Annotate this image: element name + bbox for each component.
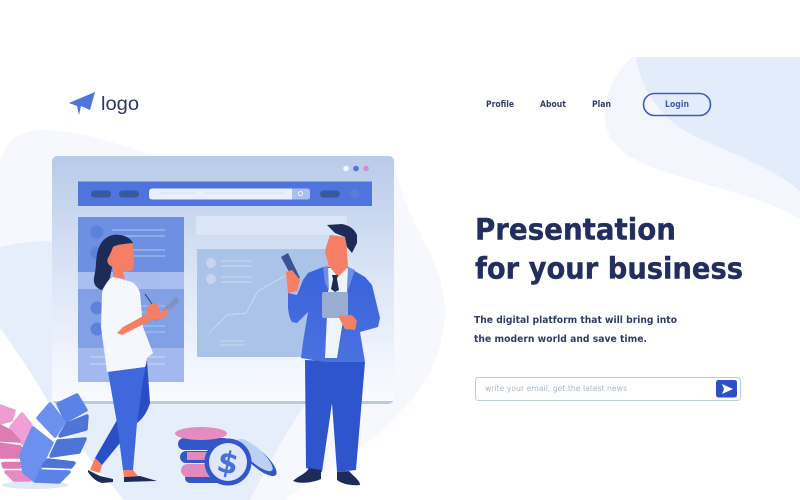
woman tablet [153, 296, 179, 321]
man trousers [305, 360, 365, 472]
navigation [486, 100, 611, 110]
background blob: top right dark [636, 57, 800, 191]
heading [475, 212, 743, 286]
heading: for your business [475, 252, 743, 286]
woman shoes [88, 470, 157, 483]
man hair [327, 224, 357, 253]
dollar coin: $ [214, 444, 242, 483]
coins stack [175, 427, 281, 486]
top content bar [196, 216, 347, 235]
description text [474, 315, 677, 345]
background blob: top right light [605, 57, 800, 219]
woman shirt [101, 277, 153, 372]
background blob: left dark [0, 241, 305, 500]
toolbar [78, 182, 372, 206]
plant shadow [2, 481, 68, 489]
description text: The digital platform that will bring into [474, 315, 677, 326]
send button [716, 380, 737, 398]
window dots [343, 166, 369, 171]
background blob: left light [0, 130, 445, 500]
placeholder text: write your email, get the latest news [485, 384, 627, 393]
woman trouser shade [137, 360, 150, 423]
woman front trouser leg [108, 366, 150, 470]
man hand with phone [286, 270, 300, 293]
top pink coin [175, 427, 227, 440]
logo text: logo [101, 94, 139, 115]
nav: profile: Profile [486, 100, 514, 110]
icon: paper plane [69, 92, 95, 115]
woman hair [94, 235, 133, 290]
woman back trouser leg [95, 420, 120, 465]
plant [0, 395, 87, 489]
description text: the modern world and save time. [474, 334, 647, 345]
tilted coin [235, 437, 281, 481]
man face and neck [325, 235, 348, 277]
line chart panel [197, 249, 332, 357]
heading: Presentation [475, 212, 676, 246]
pen [145, 294, 152, 304]
pink leaf [0, 406, 31, 480]
login button: Login [665, 100, 689, 110]
blue leaf [21, 395, 87, 482]
email input [476, 378, 740, 400]
woman face and neck [107, 243, 134, 279]
man jacket [288, 267, 380, 362]
man tablet [322, 292, 348, 318]
browser window [52, 156, 394, 404]
man lapels [323, 266, 355, 291]
left column panel [78, 217, 184, 382]
man phone [281, 253, 300, 281]
man figure [281, 224, 380, 485]
man hand with tablet [338, 315, 357, 330]
woman figure [88, 235, 179, 483]
man shoes [293, 468, 360, 485]
man shirt [325, 268, 348, 358]
man tie [331, 275, 339, 292]
woman arm [117, 303, 170, 335]
woman ankles [90, 458, 138, 477]
nav: about: About [540, 100, 566, 110]
logo [69, 92, 139, 115]
nav: plan: Plan [592, 100, 611, 110]
login button [644, 94, 710, 116]
